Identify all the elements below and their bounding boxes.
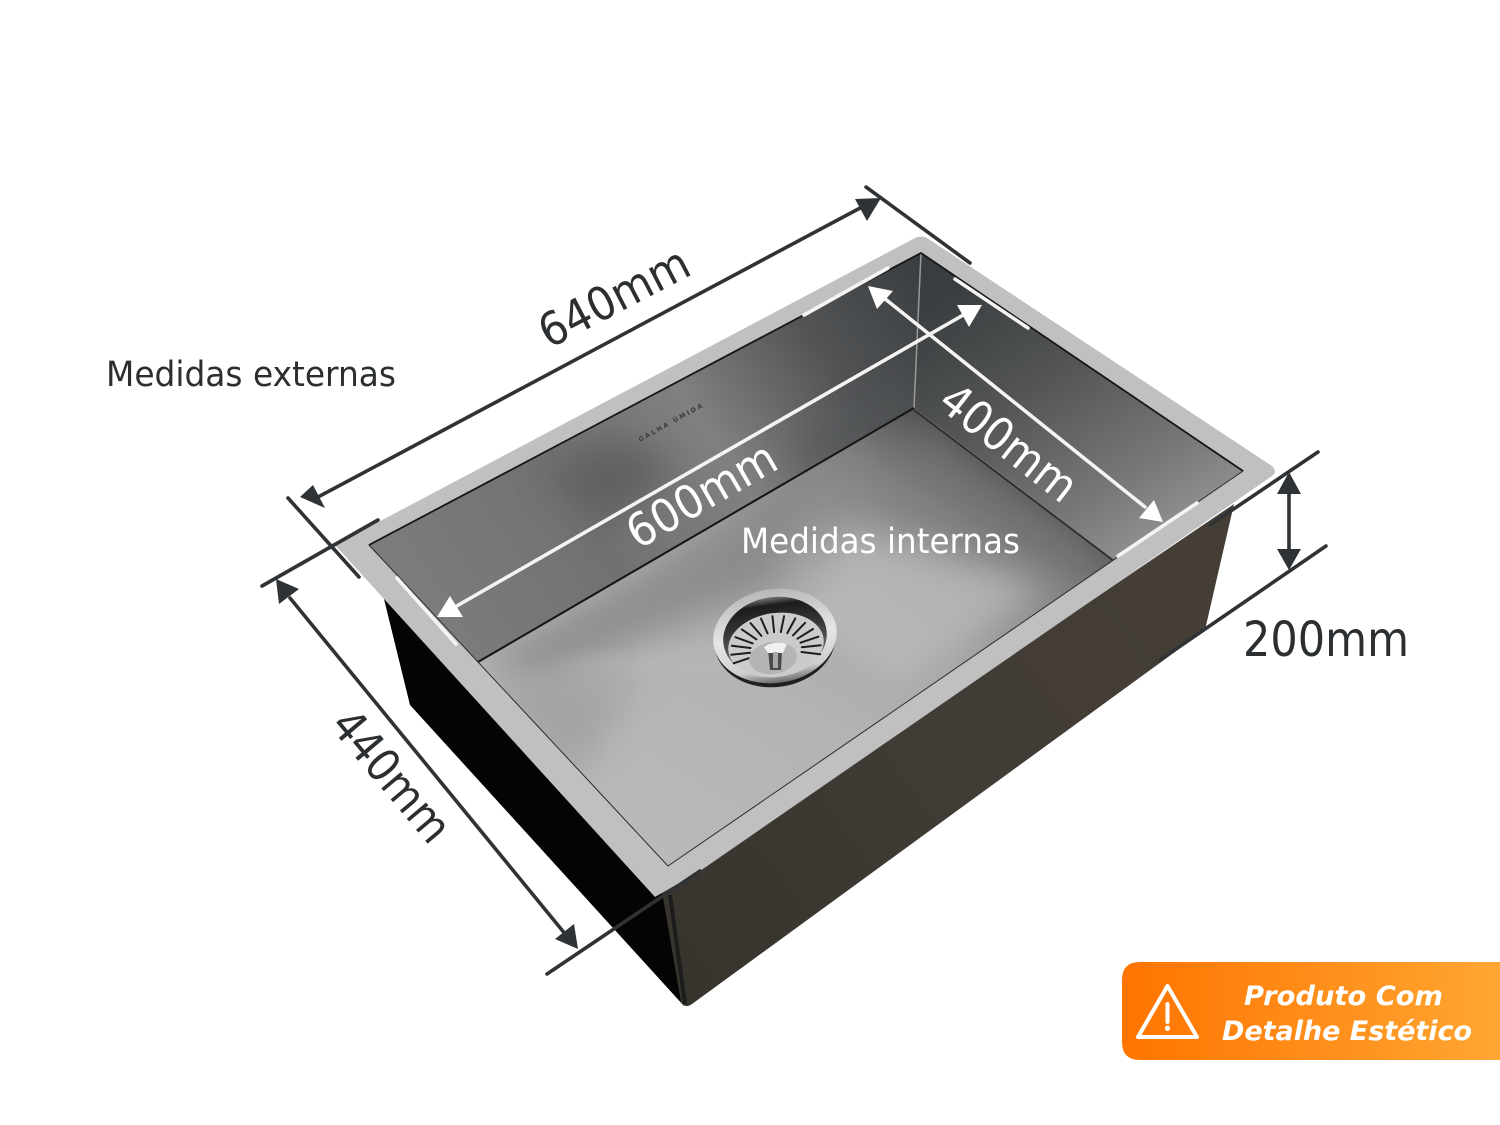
outer corner edge [668, 895, 687, 1004]
upper rim shadow [369, 253, 1243, 545]
label: 400mm: 400mm [929, 372, 1089, 513]
drain slots [728, 611, 822, 663]
strainer stem [768, 650, 782, 670]
wall seams [914, 253, 921, 408]
drain cavity [718, 590, 832, 684]
external dimension lines [262, 187, 1326, 974]
badge text: Produto Com [1244, 981, 1443, 1012]
badge: aesthetic detail [1122, 962, 1500, 1060]
brand mark: GALHA ÚMIDA [637, 401, 704, 444]
basin interior [369, 253, 1243, 866]
badge text: Detalhe Estético [1222, 1016, 1472, 1047]
label: 200mm: 200mm [1243, 612, 1409, 668]
internal arrowheads [437, 286, 1163, 617]
label: 640mm: 640mm [529, 236, 699, 359]
inner rim outline [369, 253, 1243, 866]
back right wall [914, 253, 1243, 560]
strainer centre disc [747, 639, 799, 677]
right outer wall [662, 504, 1234, 1006]
strainer plate [724, 607, 828, 683]
icon: warning triangle [1138, 986, 1197, 1037]
badge background [1122, 962, 1500, 1060]
label: medidas internas: Medidas internas [741, 522, 1020, 562]
label: medidas externas: Medidas externas [106, 355, 396, 395]
sink body exterior [383, 504, 1234, 1006]
label: 600mm: 600mm [616, 430, 786, 560]
external arrowheads [276, 198, 1301, 949]
back left wall [369, 253, 921, 662]
left outer wall [383, 595, 684, 1006]
internal dimension lines [397, 268, 1197, 644]
flange rim [335, 236, 1275, 897]
label: 440mm: 440mm [321, 698, 463, 853]
drain strainer [707, 581, 843, 695]
drain flange [708, 583, 842, 695]
basin floor [478, 408, 1115, 866]
